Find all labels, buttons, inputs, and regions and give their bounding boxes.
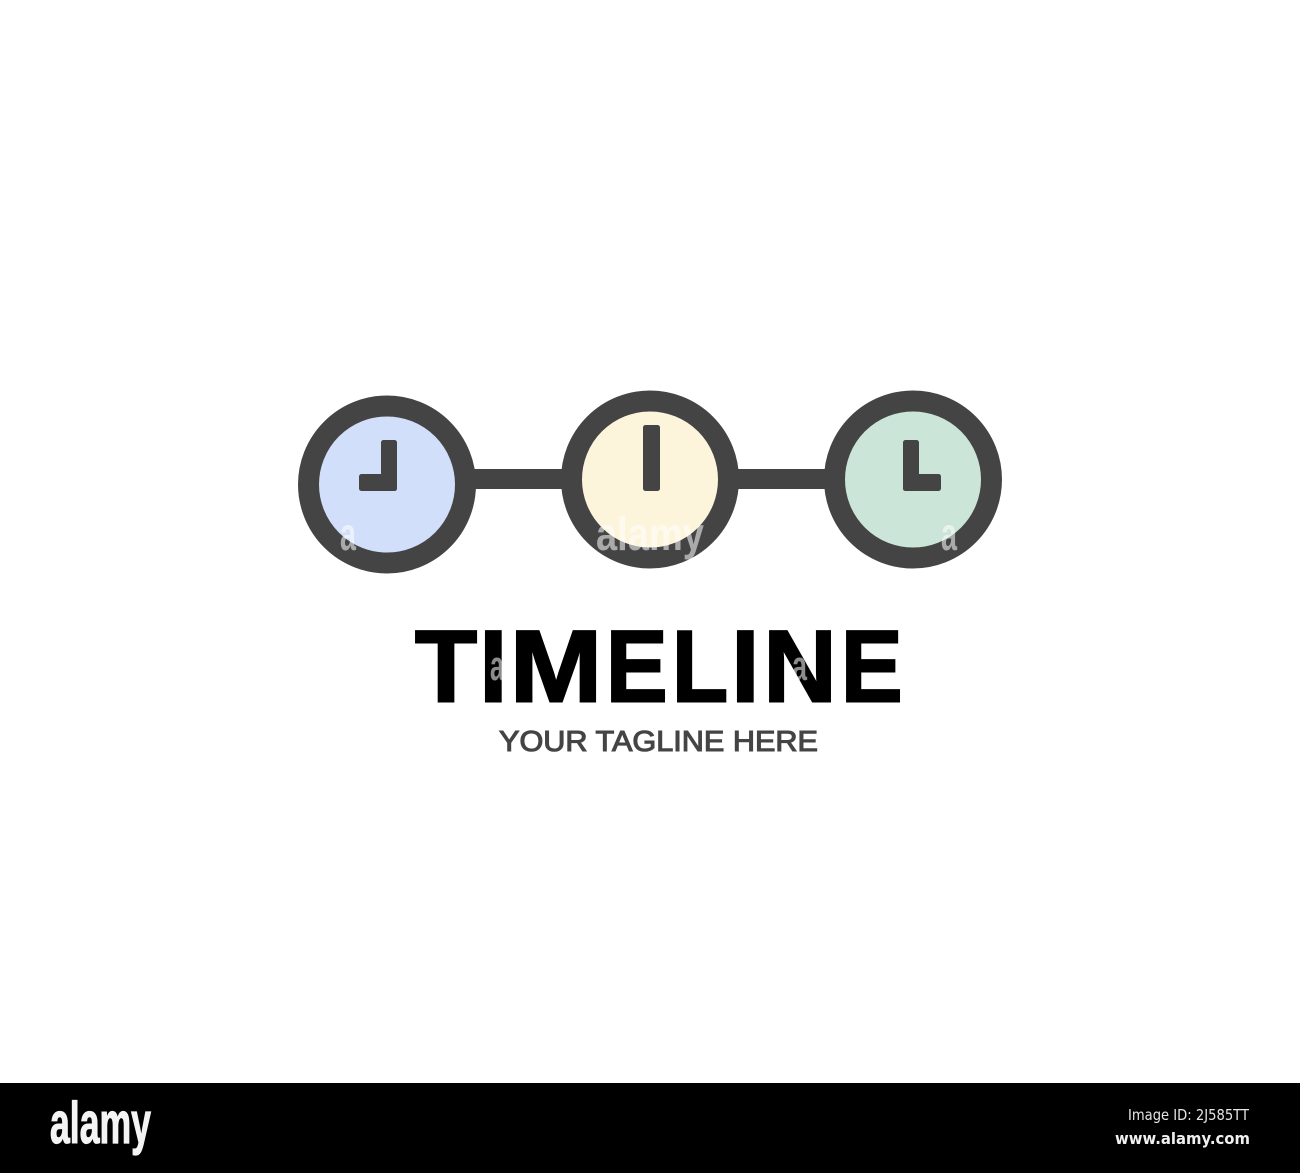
watermark: right a: a [941, 508, 957, 560]
watermark: left a: a [340, 508, 356, 560]
footer band [0, 1083, 1300, 1173]
title: M [510, 610, 602, 724]
watermark: title a left: a [490, 642, 504, 689]
title: I [731, 610, 760, 724]
clock: blue, nine o'clock [308, 406, 466, 563]
title: E [606, 610, 668, 724]
title: N [763, 610, 837, 724]
watermark: title a right: a [792, 642, 807, 689]
footer image id: Image ID: 2J585TT [1128, 1106, 1250, 1124]
tagline: YOUR TAGLINE HERE [499, 726, 818, 758]
clock: green, three o'clock [834, 401, 992, 558]
timeline logo icon [308, 401, 992, 563]
title: I [479, 610, 508, 724]
clock: yellow, twelve o'clock [572, 401, 728, 558]
footer website: www.alamy.com [1115, 1129, 1250, 1148]
connector line: first to second clock [470, 469, 567, 489]
title: E [841, 610, 903, 724]
connector line: second to third clock [733, 469, 830, 489]
watermark: center alamy: alamy [596, 508, 704, 560]
title: L [672, 610, 728, 724]
footer logo: alamy: alamy [50, 1091, 151, 1156]
title: T [415, 610, 477, 724]
